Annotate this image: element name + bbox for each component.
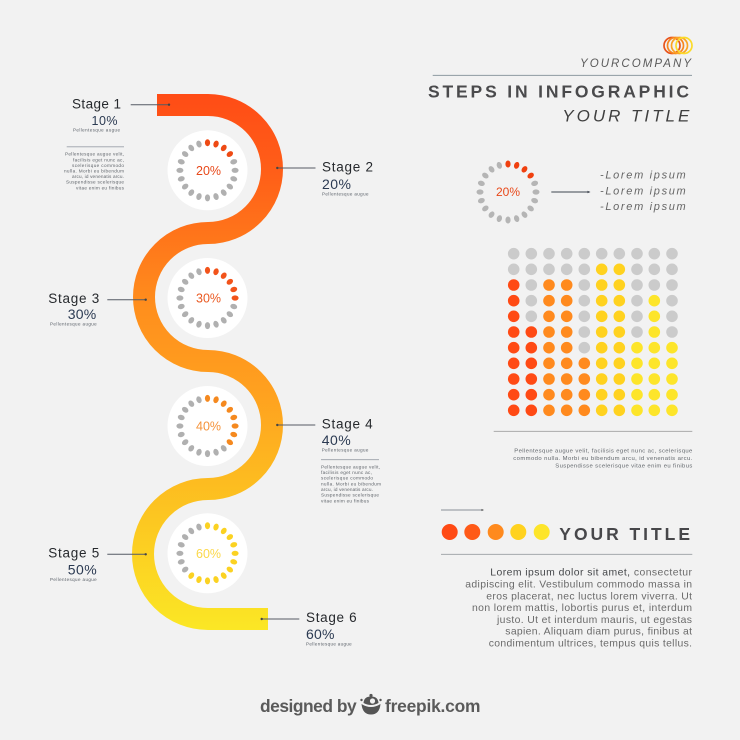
section rule <box>441 553 692 555</box>
legend items: -Lorem ipsum <box>600 169 686 181</box>
progress ring: 20%: 20% <box>196 164 221 178</box>
body paragraph: eros placerat, nec luctus lorem viverra. Ut <box>486 591 692 602</box>
chart caption: Pellentesque augue velit, facilisis eget nunc ac, scelerisque <box>514 449 693 455</box>
stage 4 note: Pellentesque augue velit, <box>321 464 380 469</box>
stage 4 note: scelerisque commodo <box>321 476 373 481</box>
stage 6 label: Stage 6 <box>306 610 357 625</box>
chart caption <box>494 431 693 469</box>
footer credit: freepik.com <box>385 696 480 716</box>
dot matrix chart <box>508 248 678 416</box>
main title: STEPS IN INFOGRAPHIC <box>428 82 689 102</box>
progress ring: 20% <box>168 130 248 210</box>
stage 3 label: 30% <box>68 306 96 322</box>
gray dots <box>508 248 678 354</box>
body paragraph: condimentum ultrices, tempus quis tellus. <box>489 639 692 650</box>
stage 6 label: 60% <box>306 626 334 642</box>
stage 4 label <box>276 416 373 453</box>
legend items: -Lorem ipsum <box>600 201 686 213</box>
body paragraph: adipiscing elit. Vestibulum commodo massa in <box>465 579 692 590</box>
progress ring: 30% <box>168 258 248 338</box>
stage 5 label: Pellentesque augue <box>50 577 97 582</box>
stage 4 note: nulla. Morbi eu bibendum <box>321 481 381 486</box>
stage 4 note: facilisis eget nunc ac, <box>321 470 372 475</box>
progress ring: 40%: 40% <box>196 420 221 434</box>
stage 1 note: arcu, id venenatis arcu. <box>72 174 124 179</box>
arrow to legend <box>551 191 590 193</box>
stage 3 label <box>48 291 147 327</box>
orange dots <box>543 279 590 416</box>
stage 1 note <box>64 147 125 190</box>
body paragraph: non lorem mattis, lobortis purus et, interdum <box>472 603 692 614</box>
stage 2 label: Pellentesque augue <box>322 191 369 196</box>
yellow dots <box>631 295 678 416</box>
stage 1 note: nulla. Morbi eu bibendum <box>64 168 124 173</box>
chart caption: Suspendisse scelerisque vitae enim eu finibus <box>555 463 692 469</box>
stage 4 note: vitae enim eu finibus <box>321 498 370 503</box>
stage 5 label: 50% <box>68 561 97 577</box>
stage 1 label: Pellentesque augue <box>73 128 120 132</box>
stage 1 label: Stage 1 <box>72 96 121 111</box>
header rule <box>433 74 692 76</box>
stage 1 label <box>72 96 170 132</box>
stage 1 note: vitae enim eu finibus <box>76 185 125 190</box>
winding stage path <box>143 105 272 619</box>
stage 4 note: arcu, id venenatis arcu. <box>321 487 373 492</box>
stage 4 label: 40% <box>322 432 351 448</box>
body paragraph: sapien. Aliquam diam purus, finibus at <box>505 627 692 638</box>
stage 1 note: Suspendisse scelerisque <box>66 180 124 185</box>
small arrow <box>441 509 484 511</box>
progress ring: 30%: 30% <box>196 292 221 306</box>
footer credit: designed by <box>260 696 357 716</box>
progress ring: 40% <box>168 386 248 466</box>
footer credit <box>260 694 480 716</box>
amber dots <box>596 264 625 416</box>
legend progress ring <box>476 160 540 224</box>
body paragraph <box>465 567 693 650</box>
stage 2 label: 20% <box>322 176 351 192</box>
stage 2 label <box>276 159 373 196</box>
company logo rings <box>664 38 692 54</box>
stage 4 label: Pellentesque augue <box>322 448 369 453</box>
stage 2 label: Stage 2 <box>322 159 373 174</box>
section title: YOUR TITLE <box>559 524 690 544</box>
body paragraph: Lorem ipsum dolor sit amet, consectetur <box>490 567 693 578</box>
red dots <box>508 279 537 416</box>
stage 4 note: Suspendisse scelerisque <box>321 493 379 498</box>
colour dots row <box>442 524 550 540</box>
stage 4 label: Stage 4 <box>322 416 373 432</box>
icon: freepik mascot <box>360 694 382 714</box>
stage 1 note: scelerisque commodo <box>72 163 124 168</box>
stage 3 label: Pellentesque augue <box>50 322 97 327</box>
progress ring: 60% <box>168 513 248 593</box>
stage 5 label <box>48 546 147 582</box>
legend items: -Lorem ipsum <box>600 185 686 197</box>
legend progress ring: 20% <box>496 185 520 199</box>
stage 6 label: Pellentesque augue <box>306 641 352 646</box>
progress ring: 60%: 60% <box>196 547 221 561</box>
stage 1 note: Pellentesque augue velit, <box>65 152 124 157</box>
stage 1 note: facilisis eget nunc ac, <box>73 157 124 162</box>
legend items <box>600 169 686 213</box>
stage 4 note <box>321 460 381 503</box>
company name: YOURCOMPANY <box>580 58 692 70</box>
chart caption: commodo nulla. Morbi eu bibendum arcu, id venenatis arcu. <box>513 456 693 462</box>
stage 3 label: Stage 3 <box>48 291 99 306</box>
stage 6 label <box>260 610 357 646</box>
subtitle: YOUR TITLE <box>562 106 690 125</box>
stage 5 label: Stage 5 <box>48 546 99 560</box>
body paragraph: justo. Ut et interdum mauris, ut egestas <box>496 615 692 626</box>
stage 1 label: 10% <box>92 114 118 128</box>
